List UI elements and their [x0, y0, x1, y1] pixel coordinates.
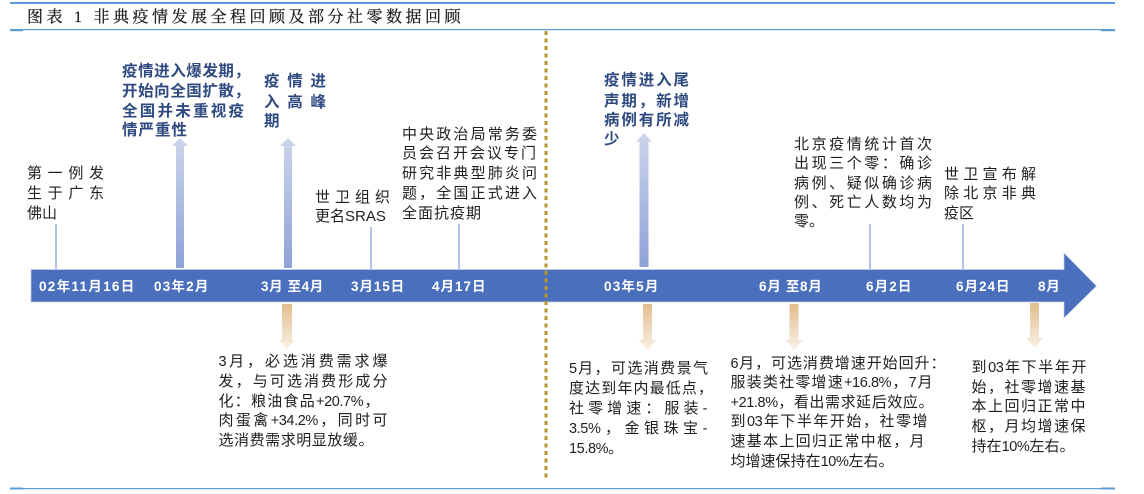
event: WHO renames: 更名SRAS [315, 208, 386, 224]
note: March: 3月，必选消费需求爆 [218, 352, 388, 370]
note: June: 到03年下半年开始，社零增 [730, 412, 927, 430]
note: June: 均增速保持在10%左右。 [730, 452, 894, 470]
event: Politburo meeting: 中央政治局常务委 [402, 126, 537, 142]
timeline date labels: 02年11月16日 [39, 279, 136, 294]
stage: outbreak period: 疫情进入爆发期， [122, 62, 250, 80]
stage: peak period [264, 72, 326, 130]
note: June: +21.8%，看出需求延后效应。 [730, 394, 934, 410]
event: Beijing three zeros [794, 136, 932, 230]
event: first case [27, 164, 104, 222]
note: May [569, 360, 713, 456]
timeline date labels: 4月17日 [432, 279, 487, 294]
note: June: 速基本上回归正常中枢，月 [730, 432, 924, 450]
stage: outbreak period: 全国并未重视疫 [122, 102, 244, 120]
stage: final period: 声期，新增 [604, 92, 689, 110]
timeline date labels: 8月 [1038, 279, 1061, 294]
note: June [730, 354, 946, 470]
event: Beijing three zeros: 病例、疑似确诊病 [794, 174, 932, 192]
event: first case: 生于广东 [27, 184, 104, 202]
stage: final period: 少 [604, 130, 621, 148]
event: Politburo meeting: 全面抗疫期 [402, 204, 482, 222]
note: May: 度达到年内最低点， [569, 380, 713, 396]
timeline date labels: 03年2月 [154, 279, 210, 294]
event: Beijing three zeros: 零。 [794, 212, 824, 230]
event: Politburo meeting: 研究非典型肺炎问 [402, 164, 537, 182]
note: August: 始，社零增速基 [972, 378, 1086, 396]
event: first case: 第一例发 [27, 164, 104, 182]
timeline date labels: 6月2日 [866, 279, 912, 294]
note: August: 持在10%左右。 [972, 438, 1074, 454]
timeline date labels: 6月 至8月 [759, 279, 822, 294]
timeline date labels: 3月 至4月 [261, 279, 324, 294]
stage: final period [604, 72, 689, 148]
timeline date labels: 03年5月 [604, 279, 660, 294]
event: Politburo meeting [402, 126, 537, 222]
stage: peak period: 期 [264, 112, 281, 130]
stage: final period: 疫情进入尾 [604, 72, 689, 88]
event: WHO renames: 世卫组织 [315, 188, 390, 206]
event: first case: 佛山 [27, 204, 57, 222]
note: June: 服装类社零增速+16.8%，7月 [730, 374, 932, 390]
event: WHO lifts Beijing: 疫区 [944, 204, 974, 222]
stage: final period: 病例有所减 [604, 112, 689, 128]
note: June: 6月，可选消费增速开始回升： [730, 354, 946, 372]
note: March: 选消费需求明显放缓。 [218, 432, 374, 448]
note: August: 到03年下半年开 [972, 358, 1086, 376]
stage: peak period: 疫情进 [264, 72, 326, 90]
note: May: 3.5%，金银珠宝- [569, 420, 707, 436]
event: WHO lifts Beijing: 除北京非典 [944, 184, 1036, 202]
title: 图表 1 非典疫情发展全程回顾及部分社零数据回顾 [27, 9, 464, 26]
note: May: 15.8%。 [569, 440, 623, 456]
note: August: 枢，月均增速保 [972, 418, 1086, 434]
note: March: 肉蛋禽+34.2%，同时可 [218, 412, 387, 428]
note: March: 发，与可选消费形成分 [218, 372, 388, 390]
note: August: 本上回归正常中 [972, 398, 1086, 414]
timeline date labels: 3月15日 [351, 279, 405, 294]
note: March: 化：粮油食品+20.7%， [218, 392, 379, 410]
event: WHO lifts Beijing [944, 166, 1036, 222]
stage: outbreak period: 开始向全国扩散， [122, 82, 250, 100]
event: Politburo meeting: 题，全国正式进入 [402, 184, 537, 202]
stage: outbreak period [122, 62, 250, 138]
stage: outbreak period: 情严重性 [122, 122, 188, 138]
event: WHO renames [315, 188, 390, 224]
event: Beijing three zeros: 出现三个零：确诊 [794, 154, 932, 172]
event: Beijing three zeros: 例、死亡人数均为 [794, 194, 932, 210]
event: Beijing three zeros: 北京疫情统计首次 [794, 136, 932, 152]
event: WHO lifts Beijing: 世卫宣布解 [944, 166, 1036, 182]
timeline date labels: 6月24日 [956, 279, 1011, 294]
note: May: 5月，可选消费景气 [569, 360, 708, 376]
note: August [972, 358, 1086, 454]
stage: peak period: 入高峰 [264, 94, 326, 110]
note: March [218, 352, 388, 448]
event: Politburo meeting: 员会召开会议专门 [402, 144, 536, 162]
note: May: 社零增速：服装- [569, 400, 707, 416]
